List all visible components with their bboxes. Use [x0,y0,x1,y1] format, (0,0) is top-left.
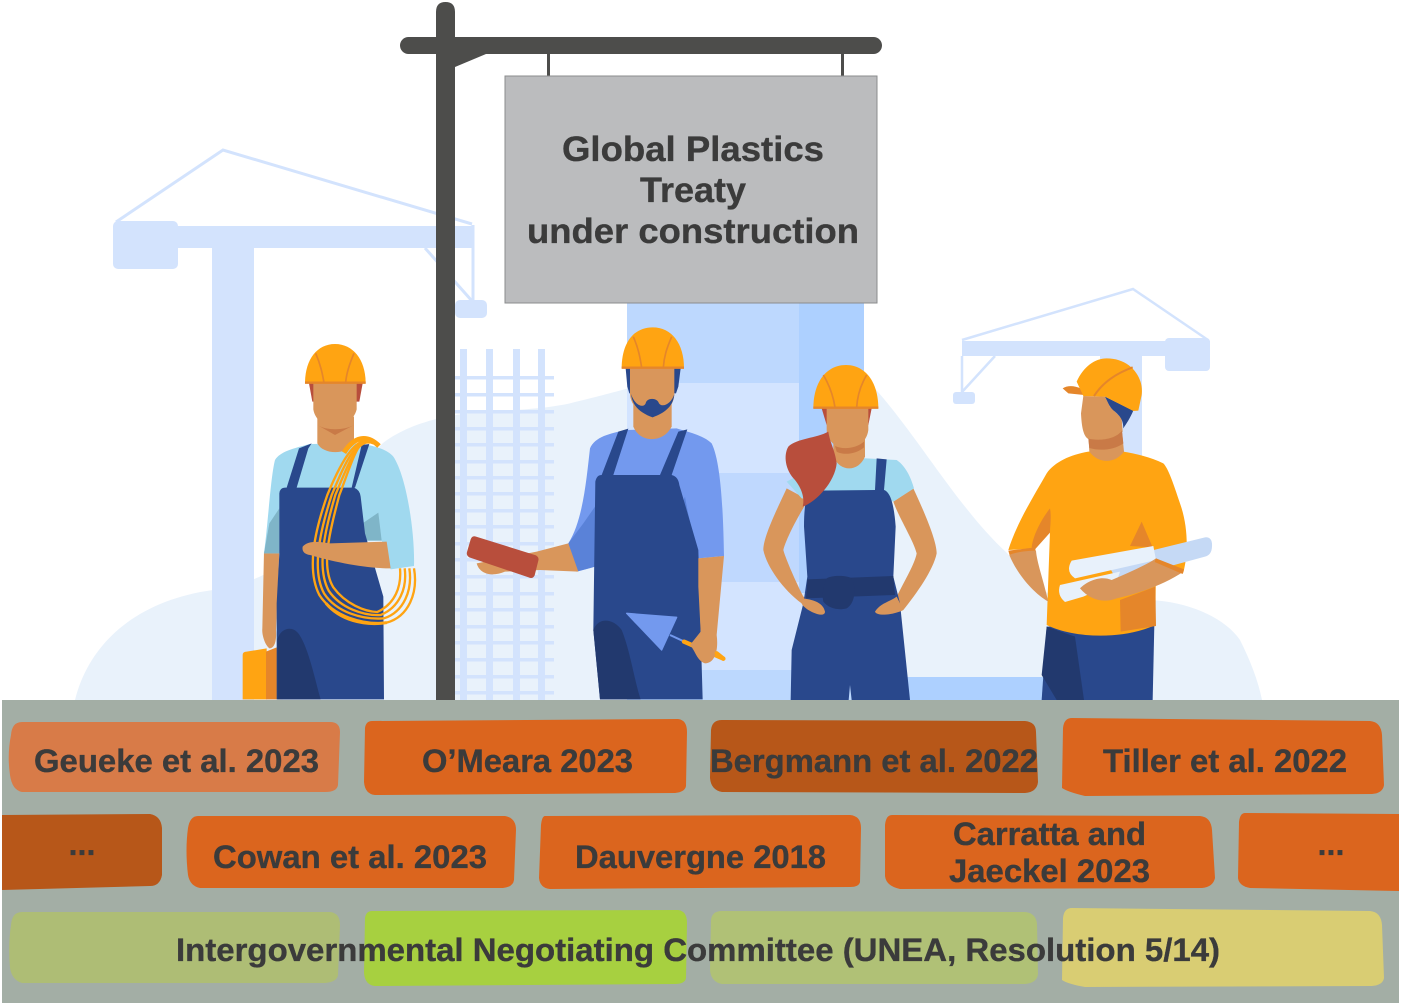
brick [467,536,539,578]
overalls [277,443,384,699]
brick: Geueke et al. 2023: Geueke et al. 2023 [34,743,319,779]
brick: ellipsis right: ... [1318,826,1344,862]
worker 4: engineer with plans [1008,358,1212,700]
brick: green 1 [9,912,340,983]
sign [505,76,877,303]
rolled plans [1059,537,1212,602]
background: building [627,303,1044,700]
brick: Cowan et al. 2023: Cowan et al. 2023 [213,839,487,875]
background: right crane [953,289,1210,465]
helmet [1063,358,1142,411]
arm and hands [477,543,578,574]
background: scaffold grid [455,349,554,700]
sign heading: Global Plastics [562,130,824,169]
brick: ellipsis left [2,814,162,890]
brick: yellow [1062,908,1384,987]
brick: Tiller et al. 2022: Tiller et al. 2022 [1103,743,1347,779]
brick: Tiller et al. 2022 [1062,718,1384,796]
helmet [622,327,684,368]
helmet [305,344,366,383]
worker 3: woman with hands on hips [763,365,937,700]
brick: Carratta and Jaeckel 2023 [885,815,1215,889]
neck and head [1081,396,1133,461]
arms [763,488,825,615]
neck and head [626,368,681,439]
trowel [627,613,723,659]
sign heading: Treaty [640,171,747,210]
helmet [813,365,878,408]
brick: Carratta and Jaeckel 2023: Carratta and [953,816,1146,852]
brick: O'Meara 2023 [364,719,687,795]
rope coil [313,439,415,624]
worker 1: electrician with rope [243,344,415,699]
worker 2: bricklayer [467,327,724,699]
shirt [1008,452,1187,636]
brick: Bergmann et al. 2022: Bergmann et al. 2022 [710,743,1038,779]
sign post [400,2,882,700]
right forearm and hand [690,556,724,663]
brick: Bergmann et al. 2022 [710,720,1038,793]
brick: ellipsis right [1238,813,1399,891]
background: left crane [113,150,487,700]
brick: Carratta and Jaeckel 2023: Jaeckel 2023 [949,853,1150,889]
ponytail [786,432,837,507]
toolbox [243,647,283,699]
brick: ellipsis left: ... [69,826,95,862]
brick: Dauvergne 2018 [539,815,861,889]
brick: Cowan et al. 2023 [186,816,516,888]
foundation label: Intergovernmental Negotiating Committee (UNEA, Resolution 5/14) [176,932,1220,968]
overalls [593,429,703,699]
brick: O'Meara 2023: O’Meara 2023 [422,743,633,779]
shirt [787,457,914,502]
brick: green 2 [364,910,687,986]
brick: Geueke et al. 2023 [9,722,340,792]
overalls [791,458,910,700]
hands [801,597,903,615]
brick: Dauvergne 2018: Dauvergne 2018 [575,839,826,875]
background: pale hills [75,340,1262,700]
arm across body [302,542,391,568]
brick: green 3 [710,911,1038,984]
sign heading: under construction [527,212,859,251]
brick wall [2,700,1399,1003]
